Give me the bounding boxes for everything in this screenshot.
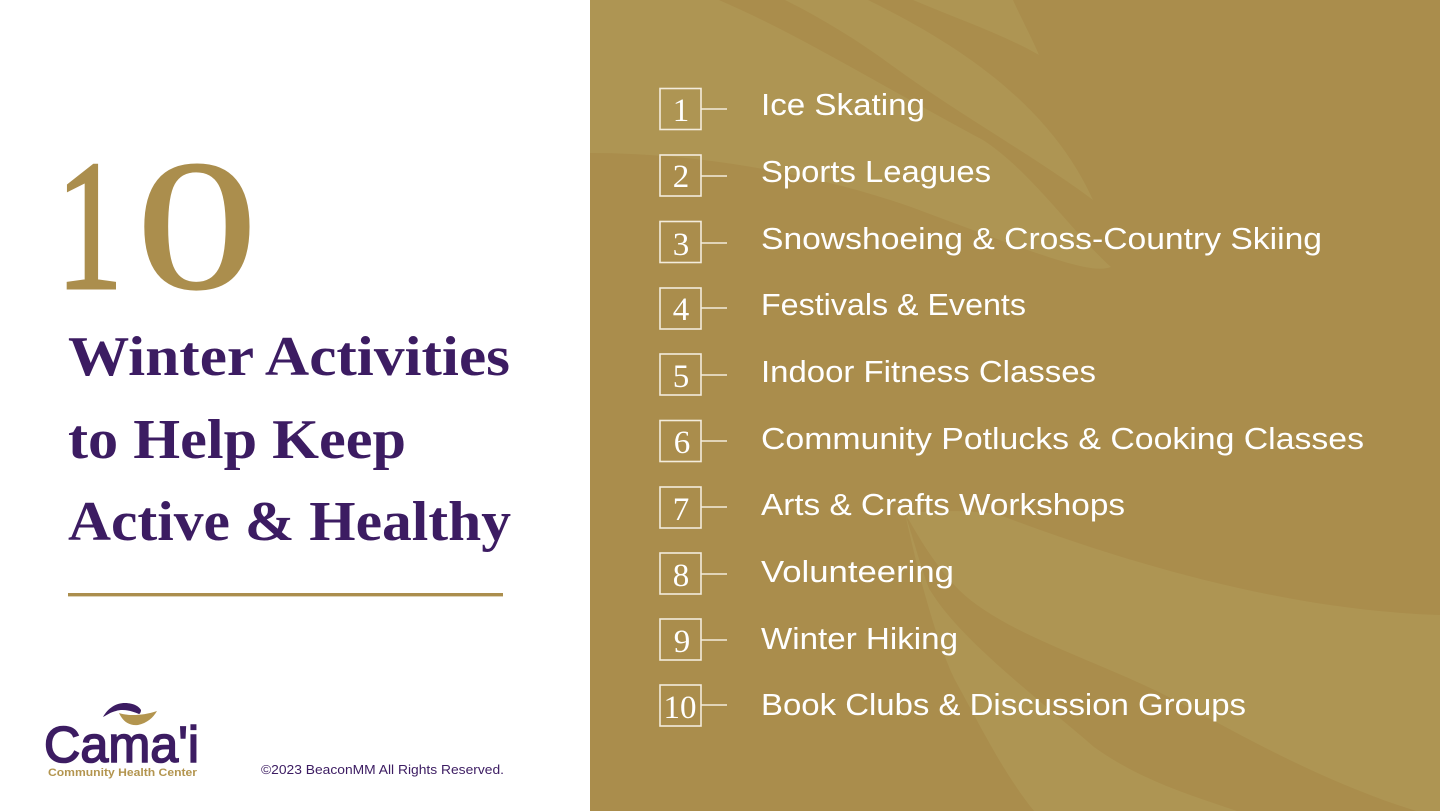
- item 2: Sports Leagues: 2: [673, 159, 689, 195]
- item 8: Volunteering: [660, 553, 954, 594]
- panel: right gold activities panel: [590, 0, 1440, 811]
- item 6: Community Potlucks and Cooking Classes: 6: [674, 425, 690, 461]
- item 3: Snowshoeing and Cross-Country Skiing: Snowshoeing & Cross-Country Skiing: [761, 221, 1322, 256]
- item 5: Indoor Fitness Classes: Indoor Fitness Classes: [761, 354, 1096, 389]
- item 7: Arts and Crafts Workshops: [660, 487, 1125, 528]
- panel: left white title panel: [0, 0, 590, 811]
- big number 10: 0: [136, 122, 258, 328]
- big number 10: [56, 122, 258, 329]
- item 9: Winter Hiking: [660, 619, 958, 660]
- icon: purple and gold swoosh: [103, 703, 157, 725]
- title: [68, 326, 511, 553]
- item 4: Festivals and Events: [660, 287, 1026, 329]
- item 6: Community Potlucks and Cooking Classes: Community Potlucks & Cooking Classes: [761, 421, 1364, 456]
- item 7: Arts and Crafts Workshops: 7: [673, 492, 689, 528]
- item 1: Ice Skating: [660, 87, 925, 130]
- title: to Help Keep: [68, 409, 406, 471]
- item 2: Sports Leagues: [660, 154, 991, 196]
- item 10: Book Clubs and Discussion Groups: [660, 685, 1246, 726]
- logo tagline: Community Health Center: [48, 767, 198, 779]
- item 3: Snowshoeing and Cross-Country Skiing: 3: [673, 227, 689, 263]
- item 10: Book Clubs and Discussion Groups: Book Clubs & Discussion Groups: [761, 687, 1246, 722]
- title: Active & Healthy: [68, 491, 511, 553]
- item 9: Winter Hiking: 9: [674, 624, 690, 660]
- item 5: Indoor Fitness Classes: 5: [673, 359, 689, 395]
- item 6: Community Potlucks and Cooking Classes: [660, 420, 1364, 462]
- item 2: Sports Leagues: Sports Leagues: [761, 154, 991, 189]
- item 1: Ice Skating: 1: [673, 93, 689, 129]
- copyright: ©2023 BeaconMM All Rights Reserved.: [261, 763, 504, 777]
- item 9: Winter Hiking: Winter Hiking: [761, 621, 958, 656]
- big number 10: 1: [56, 124, 123, 329]
- item 5: Indoor Fitness Classes: [660, 354, 1096, 395]
- item 7: Arts and Crafts Workshops: Arts & Crafts Workshops: [761, 487, 1125, 522]
- item 4: Festivals and Events: 4: [673, 292, 689, 328]
- item 3: Snowshoeing and Cross-Country Skiing: [660, 221, 1322, 263]
- item 1: Ice Skating: Ice Skating: [761, 87, 925, 122]
- logo: Cama'i Community Health Center: [44, 703, 199, 779]
- item 4: Festivals and Events: Festivals & Events: [761, 287, 1026, 322]
- title: Winter Activities: [68, 326, 510, 388]
- item 8: Volunteering: 8: [673, 558, 689, 594]
- item 10: Book Clubs and Discussion Groups: 10: [664, 690, 696, 726]
- logo wordmark: Cama'i: [44, 716, 199, 773]
- activity list: [660, 87, 1364, 726]
- item 8: Volunteering: Volunteering: [761, 554, 954, 589]
